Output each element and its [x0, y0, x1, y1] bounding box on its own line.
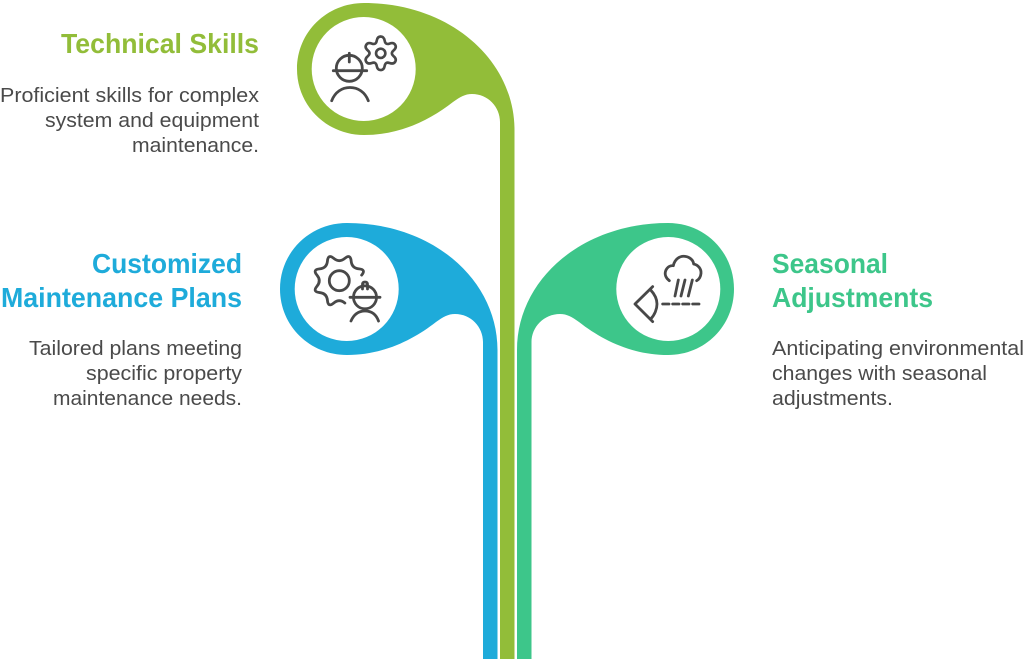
text block: technical skills description: system and equipment [45, 109, 259, 132]
text block: technical skills description: maintenance. [132, 134, 259, 157]
panel: customized maintenance stem [280, 223, 498, 659]
text block: seasonal adjustments description: adjustments. [772, 387, 893, 410]
text block: customized plans description: Tailored plans meeting [29, 337, 242, 360]
text block: customized plans description: maintenance needs. [53, 387, 242, 410]
sea green stem and teardrop [517, 223, 734, 659]
panel: technical skills stem [297, 3, 514, 659]
blue stem and teardrop [280, 223, 498, 659]
green stem and teardrop [297, 3, 514, 659]
heading: Customized Maintenance Plans: Maintenance Plans [1, 282, 242, 313]
heading: Customized Maintenance Plans: Customized [92, 248, 242, 279]
text block: customized plans description: specific property [86, 362, 243, 385]
sea green icon circle [616, 237, 720, 341]
heading: Customized Maintenance Plans [1, 248, 242, 313]
heading: Seasonal Adjustments: Seasonal [772, 248, 888, 279]
text block: customized plans description [29, 337, 243, 410]
icon: cloud, rain and eye [635, 256, 701, 322]
heading: Seasonal Adjustments [772, 248, 933, 313]
text block: seasonal adjustments description [772, 337, 1023, 410]
green icon circle [312, 17, 416, 121]
text block: seasonal adjustments description: Anticipating environmental [772, 337, 1023, 360]
icon: worker with gear [332, 37, 396, 101]
blue icon circle [295, 237, 399, 341]
panel: seasonal adjustments stem [517, 223, 734, 659]
text block: technical skills description: Proficient skills for complex [0, 84, 260, 107]
text block: technical skills description [0, 84, 260, 157]
text block: seasonal adjustments description: changes with seasonal [772, 362, 987, 385]
heading: Seasonal Adjustments: Adjustments [772, 282, 933, 313]
heading: Technical Skills: Technical Skills [61, 28, 259, 59]
icon: gear with worker [315, 257, 380, 321]
